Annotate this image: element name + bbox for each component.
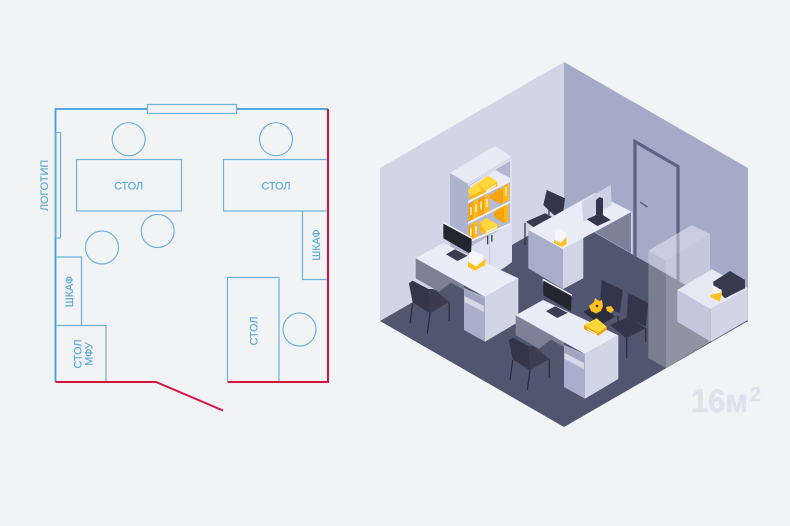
logo panel [39, 132, 60, 238]
desk A [416, 243, 518, 342]
desk 1: СТОЛ [114, 180, 143, 192]
MFP desk [56, 326, 106, 381]
cat figure [589, 298, 614, 314]
chair circles [86, 123, 316, 346]
desk 2 [224, 160, 327, 211]
area label: 2 [750, 384, 761, 406]
area label: 16м [691, 383, 748, 419]
chair C [509, 338, 549, 390]
right cabinet: ШКАФ [311, 229, 323, 261]
MFP desk: МФУ [84, 342, 96, 366]
floor [380, 215, 748, 427]
monitor A [443, 222, 472, 254]
translucent cabinet [648, 225, 710, 368]
left cabinet [56, 257, 82, 326]
left wall [380, 62, 564, 321]
desk C [516, 300, 618, 399]
isometric room [380, 62, 748, 427]
board 1 [468, 180, 510, 203]
logo panel: ЛОГОТИП [39, 160, 51, 211]
window [148, 104, 236, 114]
MFP desk: СТОЛ [72, 340, 84, 368]
board 3 [468, 223, 510, 243]
left cabinet: ШКАФ [64, 276, 76, 307]
shelf [450, 146, 512, 286]
desk 1 [76, 160, 182, 211]
door [635, 142, 678, 281]
floor plan [39, 104, 328, 410]
top folders [468, 170, 510, 204]
chair A [409, 281, 449, 333]
yellow binder [584, 318, 607, 336]
tray on desk A [468, 250, 485, 270]
desk 3: СТОЛ [248, 317, 260, 345]
monitor C [543, 278, 572, 311]
blue walls [56, 109, 328, 382]
red walls and door [56, 109, 328, 410]
keyboard A [446, 249, 468, 261]
chair D [583, 280, 623, 326]
lower folders [468, 218, 498, 241]
chair E [610, 293, 648, 358]
keyboard C [546, 306, 568, 318]
desk B [528, 193, 632, 289]
monitor back [582, 185, 612, 226]
desk 2: СТОЛ [262, 180, 290, 192]
right wall [564, 62, 748, 322]
middle binders [468, 194, 508, 223]
MFP desk [677, 269, 748, 342]
board 2 [468, 201, 510, 224]
right cabinet [302, 211, 327, 280]
printer [713, 271, 745, 298]
tray on MFP desk [711, 285, 722, 302]
chair back desk [525, 190, 565, 245]
desk 3 [228, 278, 279, 381]
tray on desk B [554, 229, 567, 247]
cabinet doors [487, 234, 492, 276]
